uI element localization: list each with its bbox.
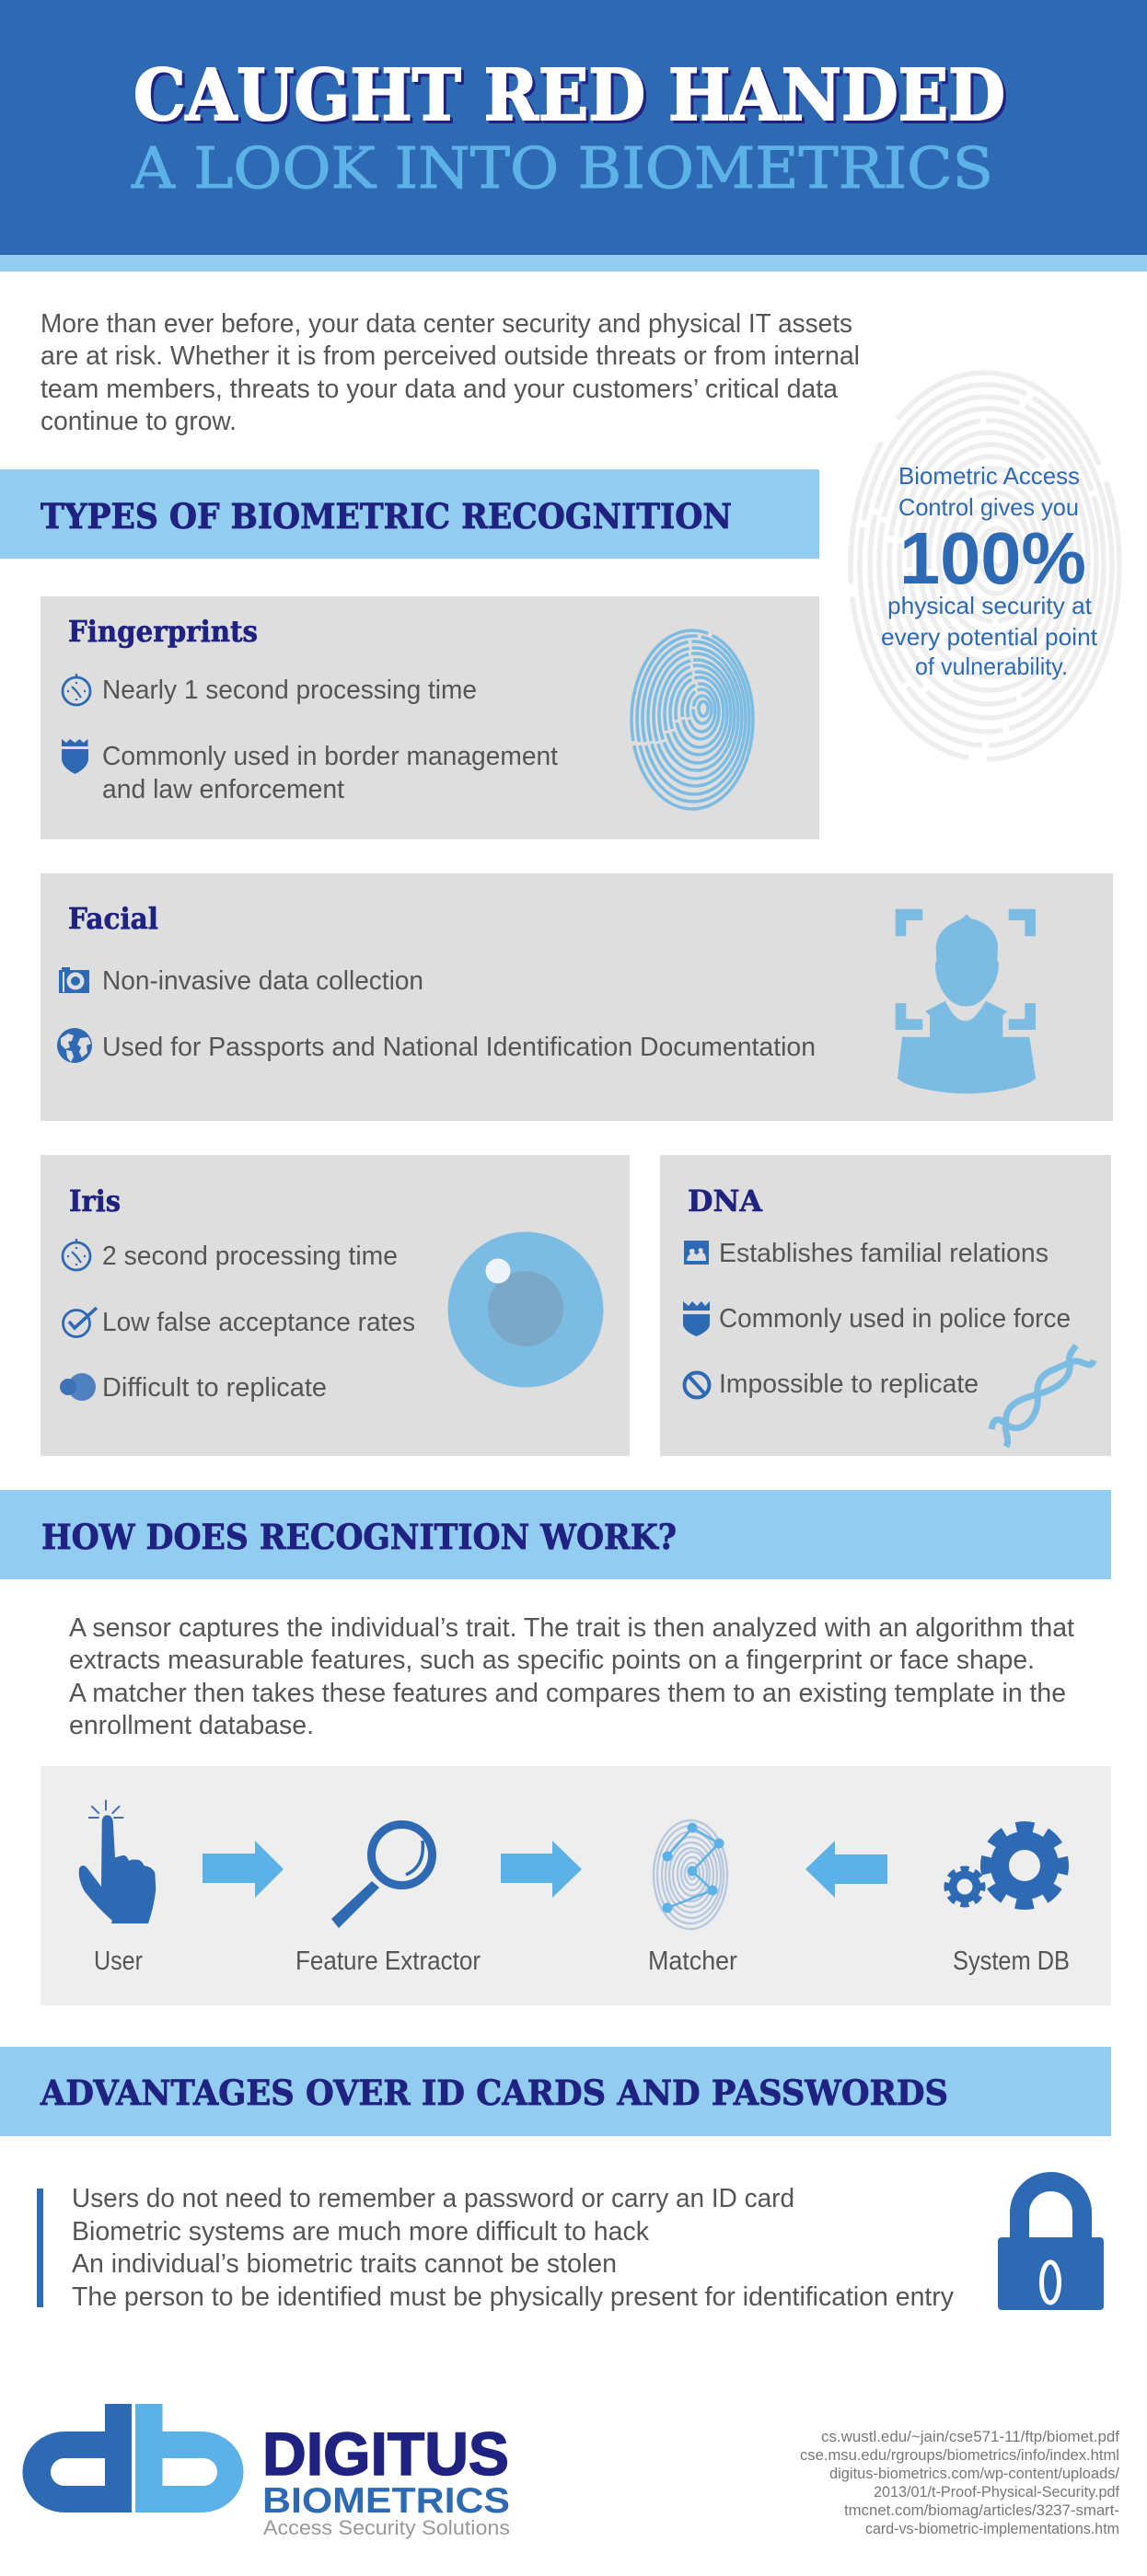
panel: iris <box>41 1155 630 1456</box>
icon: prohibited sign <box>685 1373 709 1397</box>
panel: facial: Facial <box>68 901 158 936</box>
labels: process steps <box>94 1946 1070 1976</box>
panel: fingerprints: Nearly 1 second processing time <box>102 676 477 705</box>
icon: pointing hand <box>79 1800 156 1923</box>
icon: globe <box>57 1028 92 1063</box>
panel: iris: Difficult to replicate <box>102 1373 327 1403</box>
arrow: user to feature extractor <box>203 1841 284 1898</box>
panel: iris: Iris <box>69 1184 121 1219</box>
heading: advantages over id cards and passwords: ADVANTAGES OVER ID CARDS AND PASSWORDS <box>40 2073 948 2113</box>
panel: dna: DNA <box>688 1184 763 1219</box>
text block: how recognition works: A sensor captures the individual’s trait. The trait is then analyzed with an algorithm that <box>69 1613 1074 1643</box>
text block: sources <box>800 2429 1119 2537</box>
panel: facial: Used for Passports and National Identification Documentation <box>102 1033 816 1062</box>
callout: 100% physical security over fingerprint <box>851 373 1119 759</box>
text block: how recognition works <box>69 1613 1074 1740</box>
text block: advantages list: Biometric systems are much more difficult to hack <box>72 2217 650 2247</box>
callout: 100% physical security over fingerprint: Control gives you <box>898 493 1079 521</box>
labels: process steps: User <box>94 1946 143 1976</box>
intro text block <box>41 309 860 436</box>
logo: digitus biometrics <box>23 2404 510 2539</box>
callout: 100% physical security over fingerprint: physical security at <box>887 592 1093 619</box>
text block: advantages list <box>37 2184 955 2312</box>
panel: header banner <box>0 0 1147 271</box>
panel: dna: Impossible to replicate <box>719 1369 979 1399</box>
panel: iris: Low false acceptance rates <box>102 1308 415 1337</box>
panel: fingerprints: and law enforcement <box>102 775 344 804</box>
icon: family photo <box>684 1241 709 1265</box>
icon: overlapping circles <box>60 1373 96 1401</box>
text block: advantages list: An individual’s biometric traits cannot be stolen <box>72 2249 617 2279</box>
intro text block: are at risk. Whether it is from perceived outside threats or from internal <box>41 341 860 371</box>
arrow: system db to matcher <box>805 1841 887 1898</box>
panel: dna: Commonly used in police force <box>719 1304 1071 1334</box>
labels: process steps: Feature Extractor <box>295 1946 481 1976</box>
labels: process steps: System DB <box>953 1946 1070 1976</box>
panel: recognition process diagram <box>41 1766 1111 2005</box>
callout: 100% physical security over fingerprint: Biometric Access <box>898 462 1080 490</box>
heading: how does recognition work: HOW DOES RECOGNITION WORK? <box>41 1517 677 1557</box>
panel: fingerprints: Fingerprints <box>68 614 258 649</box>
icon: dna helix <box>991 1346 1094 1447</box>
panel: facial <box>41 873 1113 1121</box>
callout: 100% physical security over fingerprint: of vulnerability. <box>915 653 1068 680</box>
text block: how recognition works: extracts measurable features, such as specific points on a fingerprint or face shape. <box>69 1646 1035 1675</box>
text block: how recognition works: A matcher then takes these features and compares them to an existing template in the <box>69 1679 1066 1708</box>
text block: sources: tmcnet.com/biomag/articles/3237-smart- <box>844 2502 1119 2519</box>
heading: how does recognition work <box>0 1490 1111 1579</box>
text block: advantages list: The person to be identified must be physically present for identification entry <box>72 2282 955 2312</box>
panel: fingerprints <box>41 596 819 839</box>
callout: 100% physical security over fingerprint: 100% <box>899 517 1086 599</box>
icon: stopwatch <box>63 674 90 705</box>
panel: facial: Non-invasive data collection <box>102 966 423 996</box>
icon: camera <box>59 967 89 993</box>
icon: shield <box>62 739 88 774</box>
logo: digitus biometrics: Access Security Solutions <box>263 2516 510 2539</box>
subtitle: A LOOK INTO BIOMETRICS <box>131 134 993 202</box>
icon: shield <box>683 1301 710 1336</box>
text block: sources: cse.msu.edu/rgroups/biometrics/info/index.html <box>800 2447 1119 2464</box>
text block: sources: cs.wustl.edu/~jain/cse571-11/ftp/biomet.pdf <box>821 2429 1119 2445</box>
arrow: feature extractor to matcher <box>501 1841 582 1898</box>
callout: 100% physical security over fingerprint: every potential point <box>881 623 1098 651</box>
panel: iris: 2 second processing time <box>102 1242 398 1271</box>
text block: sources: digitus-biometrics.com/wp-content/uploads/ <box>829 2466 1119 2482</box>
text block: sources: card-vs-biometric-implementations.htm <box>865 2521 1119 2537</box>
icon: face scan person <box>896 909 1036 1093</box>
icon: stopwatch <box>63 1239 90 1270</box>
panel: dna: Establishes familial relations <box>719 1239 1049 1268</box>
icon: gears <box>946 1827 1063 1905</box>
intro text block: More than ever before, your data center security and physical IT assets <box>41 309 852 339</box>
labels: process steps: Matcher <box>648 1946 737 1976</box>
icon: pale fingerprint background <box>851 373 1119 759</box>
heading: types of biometric recognition <box>0 469 819 559</box>
icon: padlock <box>998 2181 1104 2310</box>
intro text block: team members, threats to your data and your customers’ critical data <box>41 375 838 404</box>
icon: check mark <box>63 1308 97 1336</box>
intro text block: continue to grow. <box>41 407 237 436</box>
icon: blue fingerprint <box>631 630 753 809</box>
text block: advantages list: Users do not need to remember a password or carry an ID card <box>72 2184 794 2213</box>
heading: advantages over id cards and passwords <box>0 2047 1111 2136</box>
panel: dna <box>660 1155 1111 1456</box>
icon: magnifying glass <box>331 1824 433 1928</box>
text block: sources: 2013/01/t-Proof-Physical-Security.pdf <box>874 2484 1119 2501</box>
logo: digitus biometrics: DIGITUS <box>262 2420 509 2488</box>
logo: digitus biometrics: BIOMETRICS <box>262 2481 510 2521</box>
text block: how recognition works: enrollment database. <box>69 1711 314 1740</box>
icon: fingerprint with matching points <box>654 1820 727 1929</box>
title: CAUGHT RED HANDED <box>133 54 1005 137</box>
panel: fingerprints: Commonly used in border management <box>102 742 558 771</box>
heading: types of biometric recognition: TYPES OF BIOMETRIC RECOGNITION <box>41 496 732 537</box>
icon: eye iris <box>447 1231 604 1388</box>
